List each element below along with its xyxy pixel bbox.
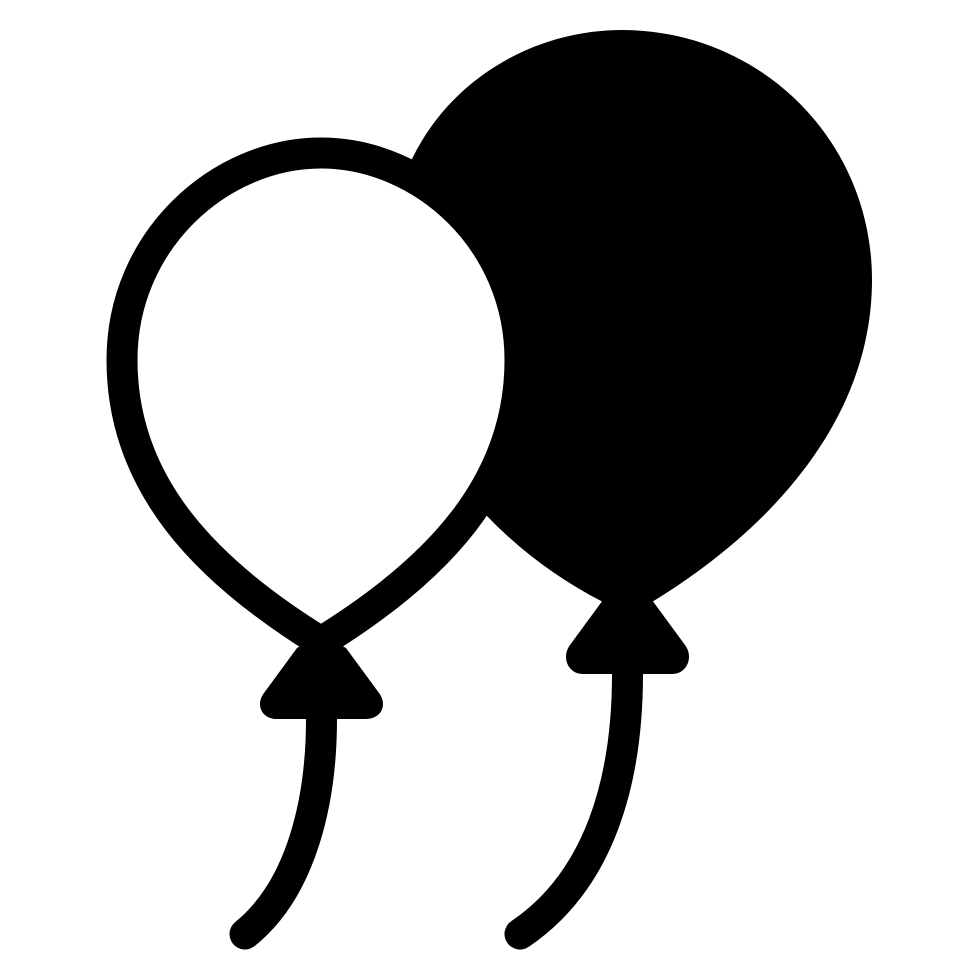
balloon string <box>245 710 322 934</box>
icon: outlined balloon (front left) <box>122 153 520 934</box>
balloon knot <box>260 634 383 719</box>
balloon knot <box>566 600 689 674</box>
balloon string <box>520 665 628 934</box>
icon: filled balloon (back right) <box>400 30 872 934</box>
balloon outline <box>122 153 520 642</box>
balloon body <box>400 30 872 602</box>
